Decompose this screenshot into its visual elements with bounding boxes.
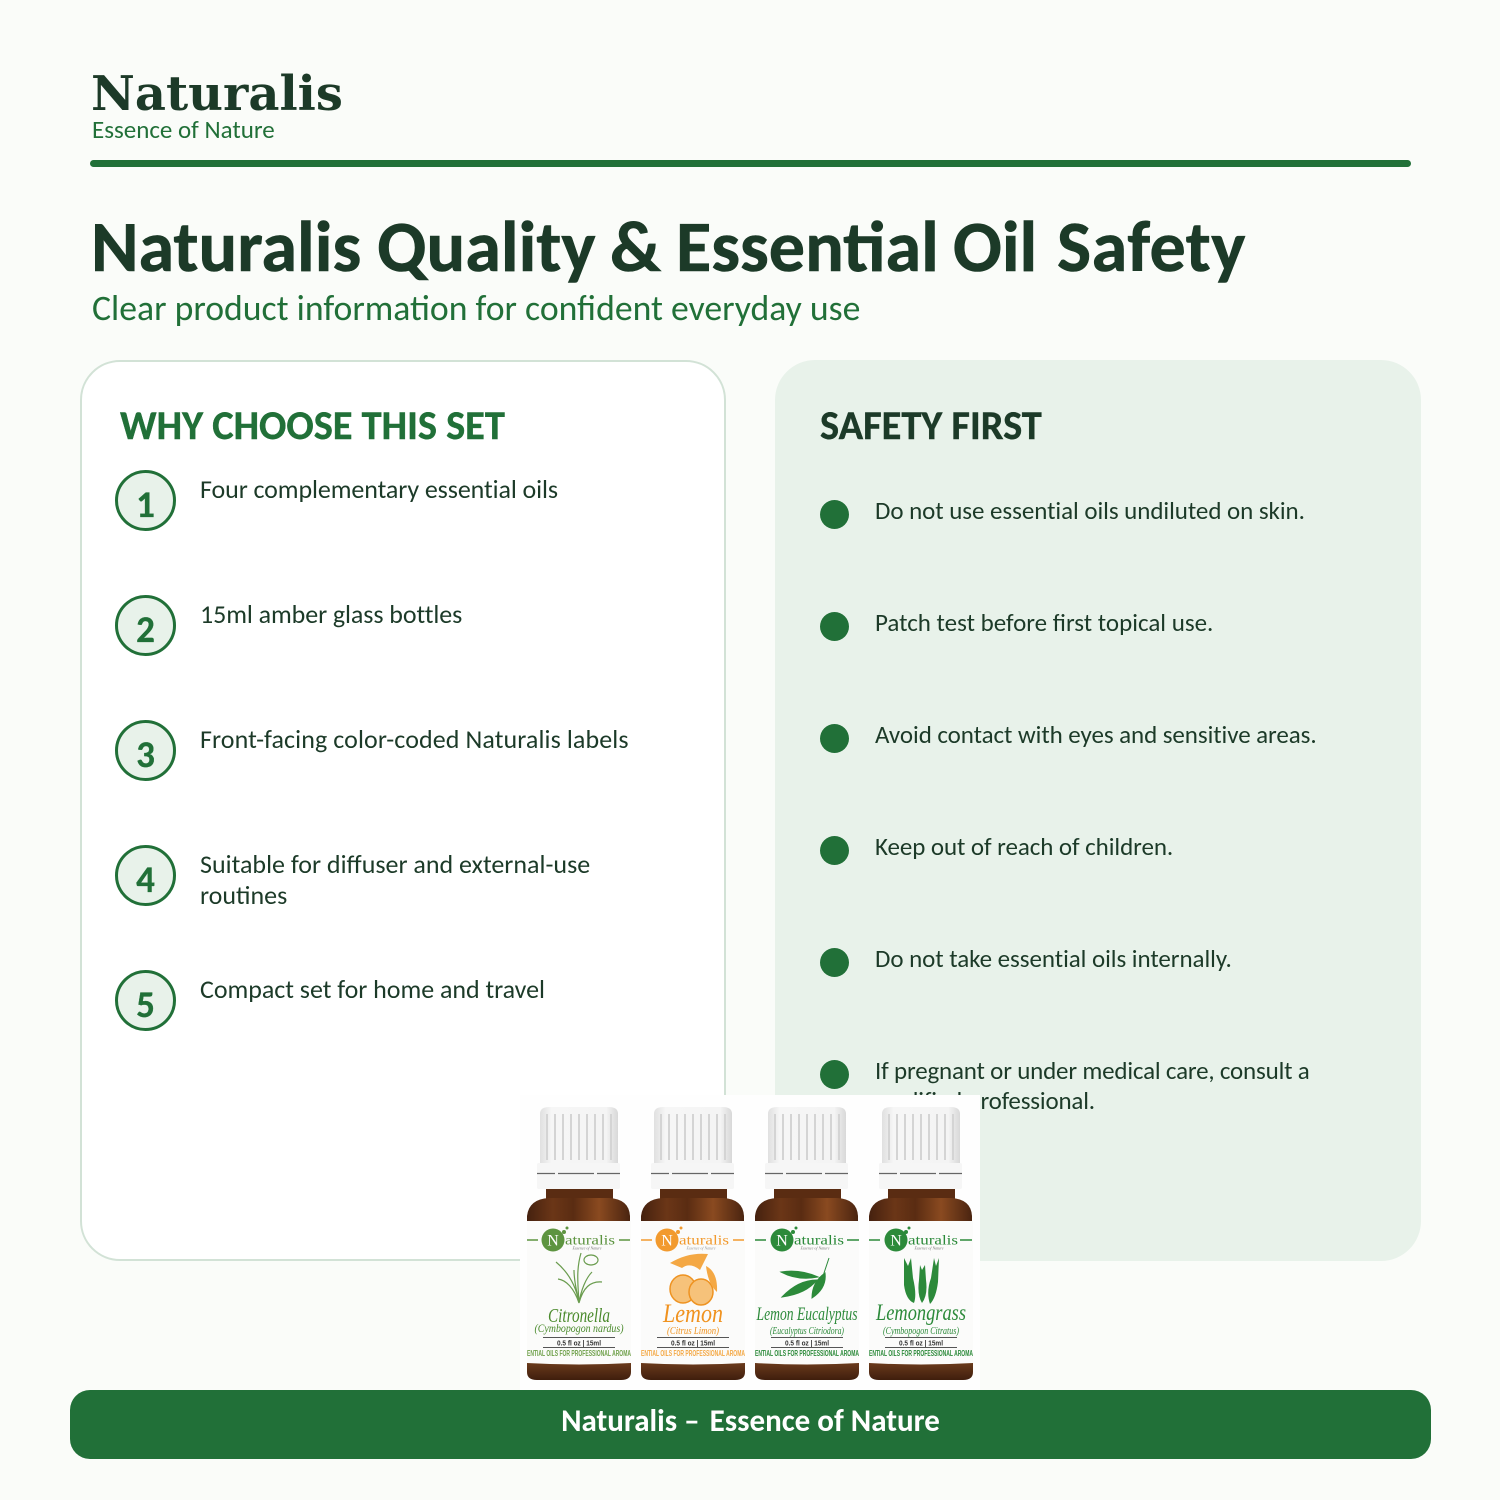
bottle: lemon eucalyptus: aturalis <box>794 1234 844 1248</box>
bottle: lemon eucalyptus: N <box>776 1232 788 1250</box>
bottle: lemongrass <box>869 1107 973 1380</box>
bullet 6 <box>820 1060 849 1089</box>
safety item 6: qualified professional. <box>875 1085 1095 1116</box>
bottle: lemon: Essence of Nature <box>686 1246 716 1250</box>
number badge 3 <box>115 720 176 781</box>
bottle: lemon: N <box>661 1232 673 1250</box>
title: Safety <box>1057 203 1246 291</box>
bullet 2 <box>820 612 849 641</box>
benefit 5: Compact set for home and travel <box>200 973 545 1005</box>
heading: why choose this set: WHY CHOOSE THIS SET <box>120 401 505 450</box>
number badge 5 <box>115 970 176 1031</box>
benefit 4: Suitable for diffuser and external-use <box>200 848 590 880</box>
safety item 2: Patch test before first topical use. <box>875 607 1213 638</box>
title: & <box>610 203 661 291</box>
bullet 1 <box>820 500 849 529</box>
bottle: citronella: Essence of Nature <box>572 1246 602 1250</box>
bullet 4 <box>820 836 849 865</box>
benefit 2: 15ml amber glass bottles <box>200 598 462 630</box>
title: Quality <box>377 203 596 291</box>
bottle: lemongrass: (Cymbopogon Citratus) <box>883 1326 960 1337</box>
bottle: lemongrass: 0.5 fl oz | 15ml <box>899 1340 943 1348</box>
bottle: lemongrass: aturalis <box>908 1234 958 1248</box>
safety item 4: Keep out of reach of children. <box>875 831 1173 862</box>
footer bar: Naturalis – Essence of Nature <box>561 1402 940 1440</box>
bottle: citronella: ENTIAL OILS FOR PROFESSIONAL AROMA <box>527 1349 631 1358</box>
title: Oil <box>953 203 1037 291</box>
bottle: citronella: aturalis <box>565 1234 615 1248</box>
benefit 3: Front-facing color-coded Naturalis labels <box>200 723 629 755</box>
title <box>91 203 1246 291</box>
bottle: citronella <box>527 1107 631 1380</box>
panel: why choose this set <box>80 360 726 1261</box>
bullet 3 <box>820 724 849 753</box>
bottle: lemon eucalyptus: Essence of Nature <box>800 1246 830 1250</box>
benefit 4 <box>200 848 590 911</box>
subtitle: Clear product information for confident everyday use <box>92 286 860 330</box>
header rule <box>90 160 1411 167</box>
number badge 4 <box>115 845 176 906</box>
number badge 2 <box>115 595 176 656</box>
bottle: lemon: aturalis <box>679 1234 729 1248</box>
bottle: lemon: 0.5 fl oz | 15ml <box>671 1340 715 1348</box>
title: Essential <box>676 203 939 291</box>
bottle: lemon eucalyptus <box>755 1107 859 1380</box>
product photo: four bottles <box>520 1095 980 1380</box>
safety item 5: Do not take essential oils internally. <box>875 943 1232 974</box>
bullet 5 <box>820 948 849 977</box>
benefit 1: Four complementary essential oils <box>200 473 558 505</box>
number badge 1: 1 <box>136 482 155 527</box>
title: Naturalis <box>91 203 361 291</box>
heading: safety first: SAFETY FIRST <box>820 401 1042 450</box>
number badge 1 <box>115 470 176 531</box>
safety item 6 <box>875 1055 1310 1116</box>
bottle: lemongrass: N <box>890 1232 902 1250</box>
number badge 2: 2 <box>136 607 155 652</box>
bottle: lemon: Lemon <box>662 1299 723 1328</box>
bottle: lemon: ENTIAL OILS FOR PROFESSIONAL AROMA <box>641 1349 745 1358</box>
bottle: lemon eucalyptus: Lemon Eucalyptus <box>756 1304 858 1325</box>
number badge 3: 3 <box>136 732 155 777</box>
bottle: lemongrass: Essence of Nature <box>914 1246 944 1250</box>
bottle: lemon: (Citrus Limon) <box>667 1326 720 1337</box>
number badge 5: 5 <box>136 982 155 1027</box>
bottle: citronella: (Cymbopogon nardus) <box>534 1321 624 1335</box>
safety item 6: If pregnant or under medical care, consult a <box>875 1055 1310 1086</box>
brand name: Naturalis <box>91 66 343 122</box>
bottle: lemon eucalyptus: 0.5 fl oz | 15ml <box>785 1340 829 1348</box>
bottle: citronella: Citronella <box>548 1305 610 1327</box>
panel: safety first <box>775 360 1421 1261</box>
bottle: citronella: N <box>547 1232 559 1250</box>
benefit 4: routines <box>200 879 287 911</box>
brand tagline: Essence of Nature <box>92 114 275 145</box>
safety item 1: Do not use essential oils undiluted on skin. <box>875 495 1305 526</box>
photo background <box>520 1095 980 1390</box>
bottle: lemon eucalyptus: (Eucalyptus Citriodora) <box>770 1326 845 1337</box>
number badge 4: 4 <box>136 857 155 902</box>
bottle: lemon <box>641 1107 745 1380</box>
bottle: citronella: 0.5 fl oz | 15ml <box>557 1340 601 1348</box>
bottle: lemon eucalyptus: ENTIAL OILS FOR PROFESSIONAL AROMA <box>755 1349 859 1358</box>
safety item 3: Avoid contact with eyes and sensitive areas. <box>875 719 1317 750</box>
footer bar <box>70 1390 1431 1459</box>
